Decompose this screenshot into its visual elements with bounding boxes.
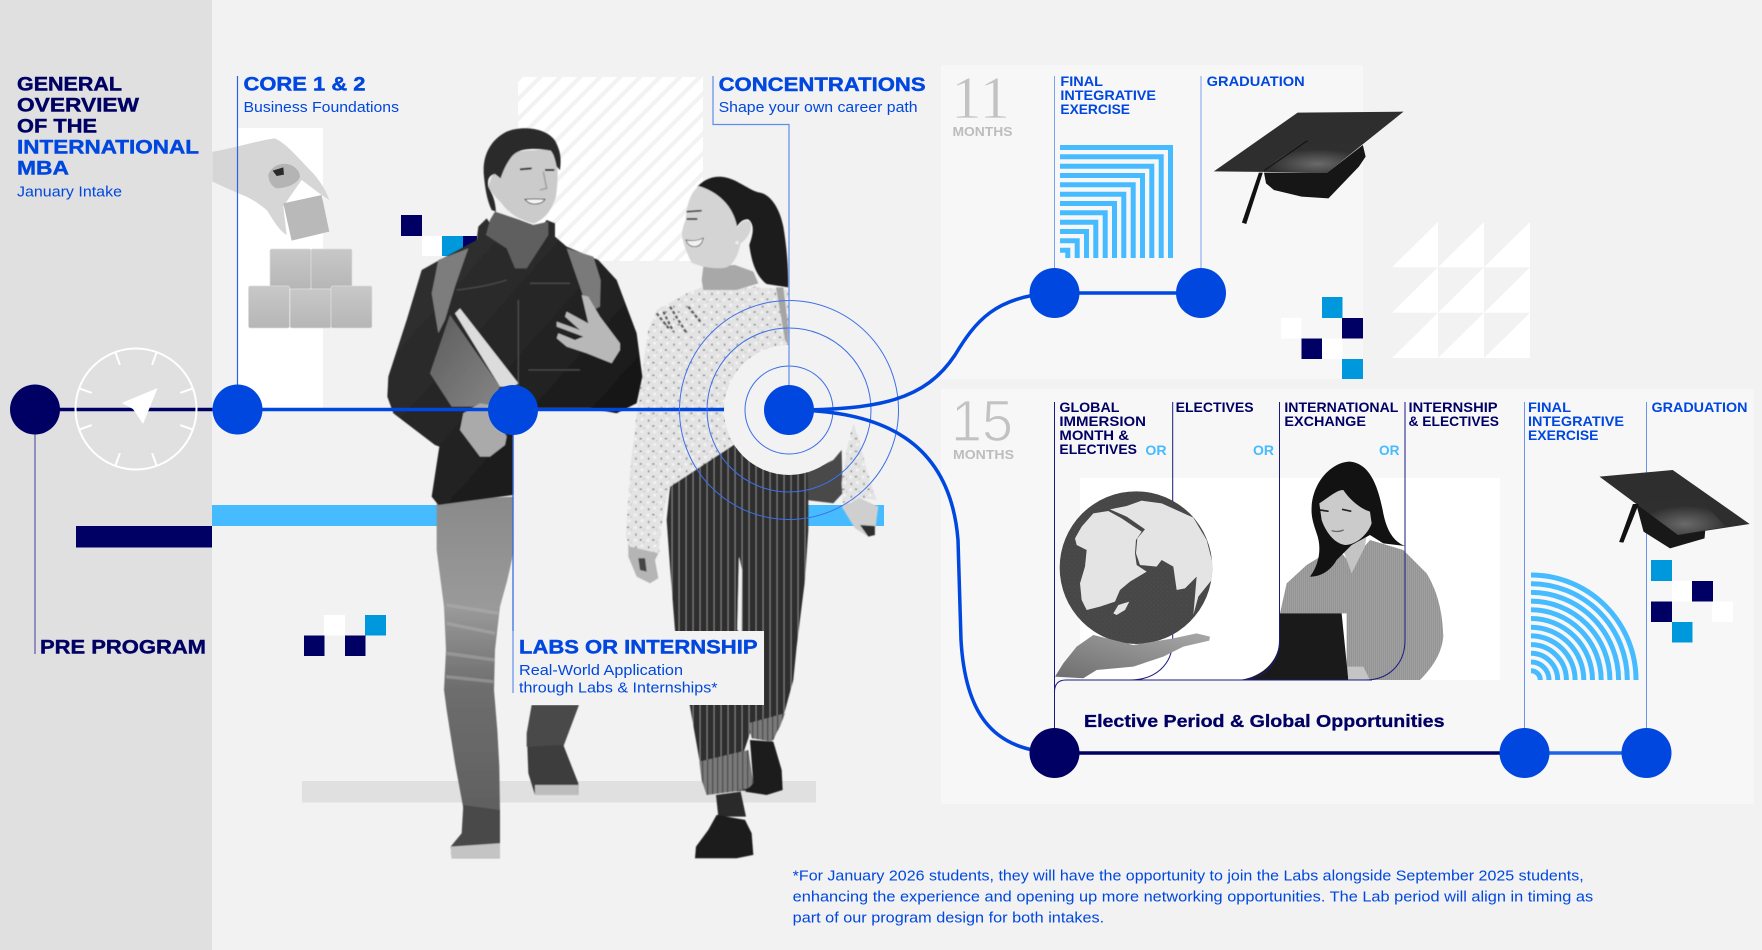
footnote: *For January 2026 students, they will have the opportunity to join the Labs alongside September 2025 students,	[793, 868, 1584, 885]
timeline nodes	[10, 268, 1672, 778]
elective period heading: Elective Period & Global Opportunities	[1084, 711, 1445, 731]
timeline main line	[35, 408, 789, 411]
label: global immersion	[1059, 399, 1146, 457]
left hand	[628, 543, 660, 583]
labs label box	[514, 631, 764, 705]
label: final integrative exercise	[1060, 73, 1156, 117]
hair	[1310, 462, 1405, 577]
bag	[802, 450, 843, 503]
icon: hand holding block	[212, 138, 329, 241]
hair	[484, 128, 561, 212]
label: final integrative exercise: INTEGRATIVE	[1528, 413, 1624, 429]
label: international exchange: INTERNATIONAL	[1284, 399, 1399, 415]
back shoe	[745, 740, 783, 795]
holding hand	[460, 403, 507, 457]
months number 15: 15	[951, 389, 1013, 454]
pixel squares lower left	[304, 615, 386, 656]
title: OF THE	[17, 116, 97, 138]
title: INTERNATIONAL	[17, 136, 199, 158]
sock	[716, 792, 746, 817]
icon: graduation cap 15 months	[1599, 470, 1750, 548]
neck	[1340, 535, 1367, 573]
title	[17, 74, 199, 180]
face	[1319, 490, 1372, 545]
knee wrinkles	[446, 605, 498, 682]
title: GENERAL	[17, 74, 122, 96]
panel: core building blocks image	[212, 128, 372, 408]
footnote: part of our program design for both intakes.	[793, 910, 1104, 927]
panel: 11 months	[941, 65, 1363, 379]
or labels: OR	[1253, 442, 1274, 458]
heading: concentrations	[719, 74, 926, 116]
student: man	[387, 128, 642, 858]
jacket zip and pocket	[457, 280, 580, 387]
decorative bars	[76, 505, 884, 802]
label: final integrative exercise: EXERCISE	[1528, 427, 1598, 443]
heading: core	[244, 74, 399, 116]
label: global immersion: MONTH &	[1059, 427, 1129, 443]
back leg	[527, 705, 579, 747]
label: electives: ELECTIVES	[1176, 399, 1254, 415]
line 15 months blue	[1524, 751, 1646, 755]
label: graduation: GRADUATION	[1652, 399, 1748, 415]
front shoe	[695, 815, 753, 858]
face	[488, 148, 558, 223]
footnote	[793, 868, 1593, 927]
knit sweater	[626, 287, 788, 553]
hair	[697, 177, 788, 287]
line 11 months	[1054, 291, 1201, 295]
heading: labs or internship: LABS OR INTERNSHIP	[519, 637, 758, 659]
label: final integrative exercise: FINAL	[1528, 399, 1571, 415]
icon: lower wooden blocks	[248, 249, 372, 328]
panel: 15 months	[941, 389, 1754, 804]
jeans	[437, 497, 579, 858]
laptop	[1240, 613, 1348, 680]
label: international exchange	[1284, 399, 1399, 429]
image: woman with laptop	[1240, 462, 1443, 680]
white image backdrop	[1080, 478, 1500, 680]
icon: compass	[76, 348, 196, 470]
months label: MONTHS	[953, 447, 1014, 462]
leader line labs lower	[512, 631, 514, 693]
sleeve right	[842, 423, 877, 507]
subtitle: January Intake	[17, 184, 122, 201]
scarf	[486, 212, 548, 268]
chart motif: concentric arcs	[1531, 575, 1636, 680]
heading: core: Business Foundations	[244, 99, 399, 116]
front shoe	[451, 805, 500, 858]
label: final integrative exercise: FINAL	[1060, 73, 1103, 89]
label: global immersion: GLOBAL	[1059, 399, 1120, 415]
leader line pre program	[34, 410, 36, 654]
label: final integrative exercise: INTEGRATIVE	[1060, 87, 1156, 103]
raised hand	[557, 295, 620, 363]
months label: MONTHS	[952, 124, 1013, 139]
leg gap	[737, 557, 742, 633]
label: internship and electives: & ELECTIVES	[1408, 413, 1499, 429]
heading: concentrations: CONCENTRATIONS	[719, 74, 926, 96]
footnote: enhancing the experience and opening up more networking opportunities. The Lab period will align in timing as	[793, 889, 1593, 906]
book	[430, 315, 500, 407]
line 15 months navy	[1054, 751, 1524, 755]
face	[682, 186, 751, 268]
hand	[1055, 633, 1210, 678]
heading: labs or internship: through Labs & Internships*	[519, 680, 718, 697]
bag strap	[776, 287, 788, 345]
image: globe on hand	[1055, 491, 1213, 678]
title: MBA	[17, 158, 69, 180]
hands	[1347, 667, 1370, 680]
sweater	[1280, 540, 1443, 680]
turtleneck	[702, 265, 758, 290]
label: final integrative exercise: EXERCISE	[1060, 101, 1130, 117]
connector lines final and graduation	[1524, 402, 1646, 728]
sidebar panel	[0, 0, 212, 950]
connector lines 11 months	[1054, 76, 1201, 270]
heading: core: CORE 1 & 2	[244, 74, 366, 96]
label: international exchange: EXCHANGE	[1284, 413, 1366, 429]
label: final integrative exercise	[1528, 399, 1624, 443]
pixel squares panel 15	[1651, 560, 1733, 642]
label: internship and electives: INTERNSHIP	[1408, 399, 1498, 415]
sweater flecks	[657, 307, 702, 333]
heading: labs or internship: Real-World Application	[519, 662, 683, 679]
heading: pre program: PRE PROGRAM	[40, 637, 206, 659]
months number 11: 11	[951, 65, 1010, 131]
or labels: OR	[1379, 442, 1400, 458]
globe	[1060, 491, 1213, 644]
target rings	[680, 300, 898, 520]
pixel squares near student	[401, 215, 477, 256]
striped square	[518, 77, 703, 261]
student: woman	[626, 177, 878, 858]
leader line core	[236, 76, 238, 385]
label: global immersion: IMMERSION	[1059, 413, 1146, 429]
heading: concentrations: Shape your own career path	[719, 99, 918, 116]
heading: labs or internship	[519, 637, 758, 697]
label: global immersion: ELECTIVES	[1059, 441, 1137, 457]
label: internship and electives	[1408, 399, 1499, 429]
chart motif: nested corners	[1060, 148, 1170, 258]
or labels: OR	[1145, 442, 1167, 458]
cuffs	[699, 750, 754, 795]
label: graduation: GRADUATION	[1207, 73, 1305, 89]
leader line labs	[512, 410, 514, 693]
leader line concentrations	[713, 76, 789, 385]
connector lines behind globe	[1130, 402, 1173, 680]
triangle grid	[1392, 222, 1530, 358]
icon: graduation cap 11 months	[1214, 112, 1404, 224]
striped trousers	[667, 437, 808, 793]
pixel squares panel 11	[1281, 297, 1363, 379]
connector lines 15 months	[1054, 402, 1405, 728]
title: OVERVIEW	[17, 95, 140, 117]
or labels	[1145, 442, 1400, 458]
right hand	[842, 498, 878, 537]
back shoe	[527, 745, 578, 795]
branch curves	[789, 293, 1054, 752]
backpack straps	[432, 248, 468, 333]
jacket	[387, 218, 642, 505]
